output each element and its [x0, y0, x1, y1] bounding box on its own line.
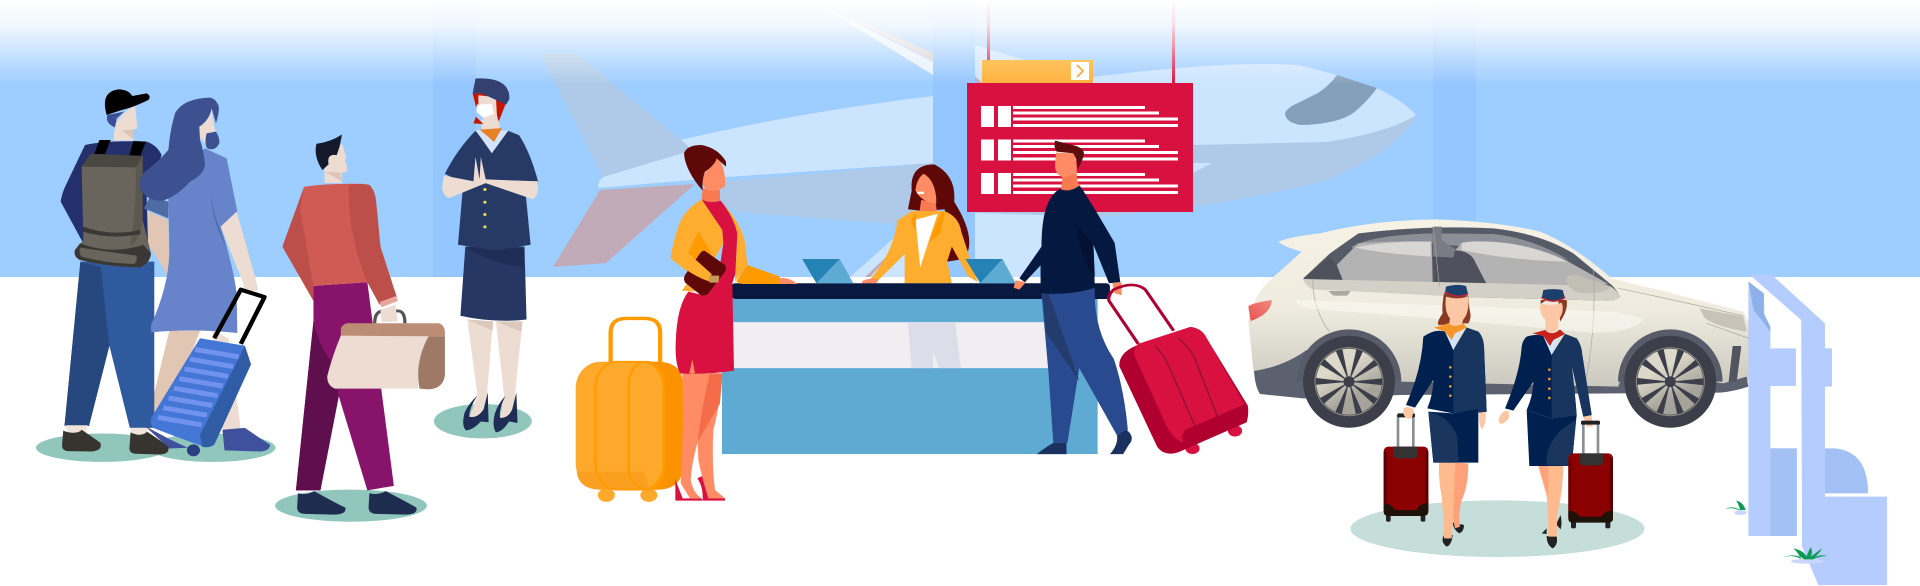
skirt: [1527, 410, 1577, 466]
blue kiosk left: [1748, 282, 1797, 536]
plant small: [1725, 501, 1747, 515]
baseball cap: [105, 89, 150, 115]
cockpit window: [1285, 75, 1377, 125]
skirt: [1428, 408, 1478, 463]
jacket: [1505, 334, 1592, 418]
red scarf: [1533, 329, 1565, 346]
man in red sweater with bag: [282, 135, 445, 515]
body highlight: [1297, 300, 1643, 333]
direction sign: [982, 60, 1093, 83]
laptop left: [802, 259, 853, 283]
white car: [1248, 219, 1753, 398]
car wheel front: [1624, 336, 1716, 428]
man shoes: [62, 425, 169, 454]
blue rolling suitcase: [151, 290, 264, 456]
car body: [1248, 219, 1753, 398]
woman in red dress: [671, 145, 797, 501]
wing accent: [865, 258, 888, 277]
headlight: [1699, 308, 1747, 332]
rear window: [1337, 241, 1433, 284]
side mirror: [1566, 275, 1610, 293]
front grille: [1729, 346, 1741, 382]
plane lower stabiliser: [553, 184, 695, 267]
right side kiosks and plants: [1725, 274, 1887, 585]
yellow suitcase: [576, 318, 683, 502]
red heels: [675, 475, 725, 501]
sign hanging poles: [987, 0, 1175, 84]
wing continuation to the right of the column: [975, 213, 1100, 277]
flight attendant with mask: [442, 78, 538, 432]
jacket: [1406, 328, 1487, 413]
car wheel rear: [1303, 336, 1395, 428]
hands: [1403, 407, 1486, 429]
right flight attendant: [1498, 289, 1613, 548]
sleeve over clutch: [671, 252, 712, 282]
right sleeve: [736, 265, 780, 284]
long hair: [139, 98, 219, 201]
dark red suitcase: [1384, 413, 1428, 522]
red dress: [676, 199, 737, 374]
hands: [1498, 411, 1593, 427]
red rolling suitcase: [1109, 285, 1248, 454]
window frame inner band: [1352, 233, 1568, 260]
top white fade: [0, 0, 1920, 85]
lower trim: [1254, 350, 1748, 398]
window frame: [1303, 227, 1620, 301]
legs: [681, 373, 702, 498]
head and hair: [1438, 293, 1471, 325]
ground shadow of flight attendants: [1350, 500, 1644, 557]
blue kiosk right: [1749, 274, 1887, 585]
man in navy sweater head: [1054, 141, 1084, 190]
man with backpack upper body: [61, 89, 162, 267]
yellow jacket: [671, 199, 723, 292]
check-in area: [576, 164, 1248, 502]
board row 2: [981, 140, 1178, 160]
receptionist: [862, 164, 978, 283]
plane tail fin: [540, 53, 693, 177]
wheel arches: [1297, 329, 1723, 382]
check-in desk: [722, 283, 1110, 454]
tail light: [1248, 300, 1272, 321]
arrow box: [1071, 62, 1089, 80]
woman in blue dress: [139, 98, 258, 333]
front window: [1455, 243, 1608, 287]
plant large: [1783, 547, 1827, 564]
left flight attendant: [1384, 285, 1487, 547]
ground shadows of the left group: [36, 404, 532, 522]
icon: chevron: [1077, 65, 1083, 77]
wing tip: [1193, 163, 1212, 173]
flight information sign: [967, 60, 1193, 212]
cap: [1445, 285, 1468, 297]
cap: [1542, 289, 1565, 302]
plane wing: [850, 205, 1100, 277]
head and hair: [1541, 300, 1567, 322]
backpack: [75, 140, 151, 267]
man trousers: [64, 262, 154, 428]
plane belly: [695, 115, 1416, 224]
airplane behind the window: [540, 5, 1416, 277]
plane fuselage: [598, 64, 1416, 188]
orange scarf: [1434, 323, 1467, 340]
door handle: [1328, 291, 1351, 296]
woman back arm: [139, 210, 169, 280]
legs and shoes: [1542, 515, 1561, 548]
door lines: [1313, 227, 1753, 385]
door sill: [1303, 279, 1620, 301]
window columns: [433, 0, 1476, 277]
board row 3: [981, 173, 1178, 194]
dark red suitcase: [1568, 421, 1613, 528]
travel bag: [327, 305, 445, 389]
man in navy sweater: [1014, 185, 1132, 454]
clutch bag: [684, 251, 726, 296]
window pillars: [1433, 227, 1457, 258]
far struts: [820, 5, 933, 75]
woman legs and shoes: [145, 331, 270, 451]
departures board: [967, 83, 1193, 212]
head: [702, 188, 720, 202]
laptop right: [966, 259, 1016, 283]
legs and shoes: [1442, 523, 1464, 547]
board row 1: [981, 106, 1178, 127]
